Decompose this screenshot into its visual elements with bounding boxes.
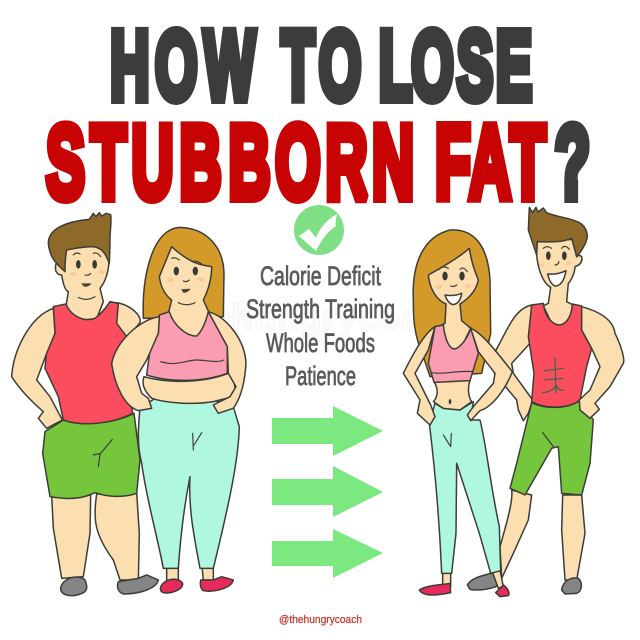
item: patience: Patience (285, 361, 356, 391)
woman legs and shoes (443, 570, 503, 588)
item: whole foods: Whole Foods (266, 328, 375, 358)
checklist text (246, 261, 395, 391)
arrow 3 (272, 529, 383, 578)
woman left arm (403, 327, 435, 425)
woman face features (436, 267, 471, 305)
man tank top (45, 302, 133, 424)
title line 1: HOW TO LOSE (110, 11, 532, 120)
title line 2: ? (555, 104, 590, 220)
man abs (542, 358, 564, 393)
man face (70, 253, 105, 299)
woman crop top (428, 325, 478, 382)
woman crop top (147, 312, 227, 380)
man legs (52, 493, 139, 580)
handle credit: @thehungrycoach (279, 614, 362, 626)
woman hair (143, 227, 224, 318)
check icon (294, 205, 344, 255)
woman after (403, 230, 512, 597)
woman belly (143, 373, 235, 403)
figures: after couple (403, 207, 624, 597)
man head and neck (55, 243, 109, 321)
title line 2: STUBBORN FAT (46, 104, 546, 220)
woman hair (413, 230, 491, 377)
title (46, 11, 590, 220)
man neck and head (536, 239, 582, 327)
woman pants (429, 402, 501, 573)
woman pants (138, 398, 239, 568)
watermark: thehungrycoach (175, 297, 465, 339)
man back arm (492, 305, 533, 421)
man tank top (528, 303, 592, 407)
man shorts (43, 413, 140, 498)
man shorts (510, 400, 593, 495)
man after (467, 207, 624, 594)
man legs (500, 490, 585, 580)
item: calorie deficit: Calorie Deficit (260, 261, 381, 291)
man hair (528, 207, 587, 257)
arrow 1 (272, 406, 383, 456)
woman right arm (208, 312, 246, 413)
woman face (167, 258, 204, 305)
man before (12, 213, 158, 596)
woman before (112, 227, 246, 593)
figures: before couple (12, 213, 246, 596)
item: strength training: Strength Training (246, 294, 395, 324)
woman head and neck (159, 247, 212, 337)
man hair (48, 213, 111, 272)
man face (539, 246, 572, 286)
man right shoulder (115, 303, 140, 338)
woman legs shoes (167, 563, 213, 582)
woman right arm (467, 328, 512, 421)
woman belly (433, 380, 472, 410)
man shoes (467, 572, 581, 594)
man right arm (579, 307, 624, 418)
woman left arm (112, 317, 159, 411)
woman neck and face (428, 248, 478, 352)
arrow 2 (272, 466, 383, 517)
man left arm (12, 308, 62, 428)
man shoes (61, 575, 158, 596)
